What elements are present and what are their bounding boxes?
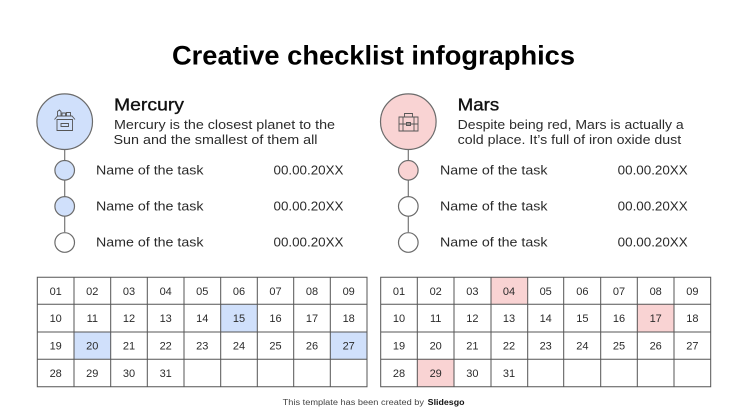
calendar: Mars: 11 [430, 313, 441, 325]
calendar: Mercury: 30 [123, 368, 135, 380]
footer credit [283, 398, 465, 407]
timeline connector [64, 148, 66, 232]
calendar: Mercury: 08 [306, 286, 318, 298]
task 2: Name of the task [440, 198, 548, 214]
timeline connector [407, 148, 409, 232]
calendar: Mercury: 02 [86, 286, 98, 298]
calendar: Mars: 09 [686, 286, 699, 298]
calendar: Mars: 30 [466, 368, 479, 380]
task 3 [398, 233, 688, 252]
calendar: Mars: 25 [613, 340, 625, 352]
task 2: 00.00.20XX [274, 198, 344, 214]
description: Mercury: Sun and the smallest of them all [114, 132, 318, 147]
calendar: Mars: 17 [650, 313, 662, 325]
task 3: 00.00.20XX [274, 234, 344, 250]
calendar: Mercury: 28 [50, 368, 62, 380]
description: Mars: cold place. It’s full of iron oxide dust [458, 132, 682, 147]
calendar: Mercury: 19 [50, 340, 62, 352]
calendar: Mercury: 17 [306, 313, 318, 325]
task 1: 00.00.20XX [274, 162, 344, 178]
calendar: Mercury: 27 [343, 340, 355, 352]
calendar: Mars: 08 [650, 286, 662, 298]
description: Mercury: Mercury is the closest planet to the [114, 117, 335, 132]
calendar: Mercury: 25 [269, 340, 282, 352]
calendar: Mercury: 11 [87, 313, 98, 325]
title: Creative checklist infographics [172, 40, 575, 70]
task 3 [55, 233, 344, 252]
footer credit: This template has been created by [283, 398, 424, 407]
calendar: Mercury: 14 [196, 313, 208, 325]
calendar: Mars: 03 [466, 286, 479, 298]
task 2 [55, 197, 344, 216]
calendar: Mercury: 29 [86, 368, 98, 380]
calendar: Mercury: 09 [343, 286, 355, 298]
calendar: Mercury: 22 [160, 340, 172, 352]
calendar: Mars: 24 [576, 340, 589, 352]
task 3: Name of the task [440, 234, 548, 250]
heading: Mercury: Mercury [114, 94, 184, 114]
task 1: Name of the task [96, 162, 204, 178]
calendar: Mercury: 05 [196, 286, 208, 298]
calendar: Mars: 18 [686, 313, 699, 325]
calendar: Mars: 21 [466, 340, 479, 352]
calendar: Mars: 12 [466, 313, 479, 325]
calendar: Mars: 02 [430, 286, 442, 298]
icon: Mars circle with briefcase [380, 94, 436, 150]
calendar: Mercury: 13 [160, 313, 172, 325]
calendar: Mars: 10 [393, 313, 405, 325]
calendar: Mercury: 07 [269, 286, 282, 298]
calendar: Mercury: 15 [233, 313, 245, 325]
calendar: Mars: 26 [650, 340, 662, 352]
calendar: Mercury: 21 [123, 340, 135, 352]
calendar: Mercury: 01 [50, 286, 62, 298]
calendar: Mars: 22 [503, 340, 515, 352]
calendar: Mercury: 20 [86, 340, 98, 352]
calendar: Mercury: 31 [160, 368, 172, 380]
task 1: Name of the task [440, 162, 548, 178]
calendar: Mars: 20 [430, 340, 442, 352]
calendar: Mars: 13 [503, 313, 515, 325]
task 3: 00.00.20XX [618, 234, 688, 250]
calendar: Mars: 01 [393, 286, 405, 298]
calendar: Mars: 27 [686, 340, 699, 352]
task 1 [55, 160, 344, 180]
heading: Mars: Mars [458, 94, 499, 114]
calendar: Mars: 31 [503, 368, 515, 380]
calendar: Mercury: 18 [343, 313, 355, 325]
calendar: Mercury: 12 [123, 313, 135, 325]
task 2: 00.00.20XX [618, 198, 688, 214]
task 1: 00.00.20XX [618, 162, 688, 178]
calendar: Mars: 29 [430, 368, 442, 380]
calendar: Mars: 15 [576, 313, 589, 325]
calendar: Mercury: 10 [50, 313, 62, 325]
calendar: Mars: 16 [613, 313, 625, 325]
description: Mars: Despite being red, Mars is actually a [458, 117, 684, 132]
calendar: Mercury: 16 [269, 313, 282, 325]
footer credit: Slidesgo [428, 398, 465, 407]
calendar: Mercury [37, 277, 367, 387]
task 2: Name of the task [96, 198, 204, 214]
calendar: Mars: 05 [540, 286, 552, 298]
calendar: Mars: 14 [540, 313, 552, 325]
calendar: Mercury: 23 [196, 340, 208, 352]
calendar: Mercury: 06 [233, 286, 245, 298]
calendar: Mars: 04 [503, 286, 515, 298]
calendar: Mercury: 24 [233, 340, 245, 352]
icon: Mercury circle with box of tools [37, 94, 92, 150]
description: Mercury [114, 117, 335, 147]
calendar: Mars: 23 [540, 340, 552, 352]
task 2 [398, 197, 688, 216]
calendar: Mercury: 04 [160, 286, 172, 298]
calendar: Mars: 07 [613, 286, 625, 298]
calendar: Mercury: 03 [123, 286, 135, 298]
calendar: Mars: 06 [576, 286, 589, 298]
task 3: Name of the task [96, 234, 204, 250]
calendar: Mars [381, 277, 711, 387]
calendar: Mars: 19 [393, 340, 405, 352]
calendar: Mercury: 26 [306, 340, 318, 352]
panel: Mars [380, 94, 688, 252]
calendar: Mars: 28 [393, 368, 405, 380]
panel: Mercury [37, 94, 344, 252]
description: Mars [458, 117, 684, 147]
task 1 [398, 160, 688, 180]
